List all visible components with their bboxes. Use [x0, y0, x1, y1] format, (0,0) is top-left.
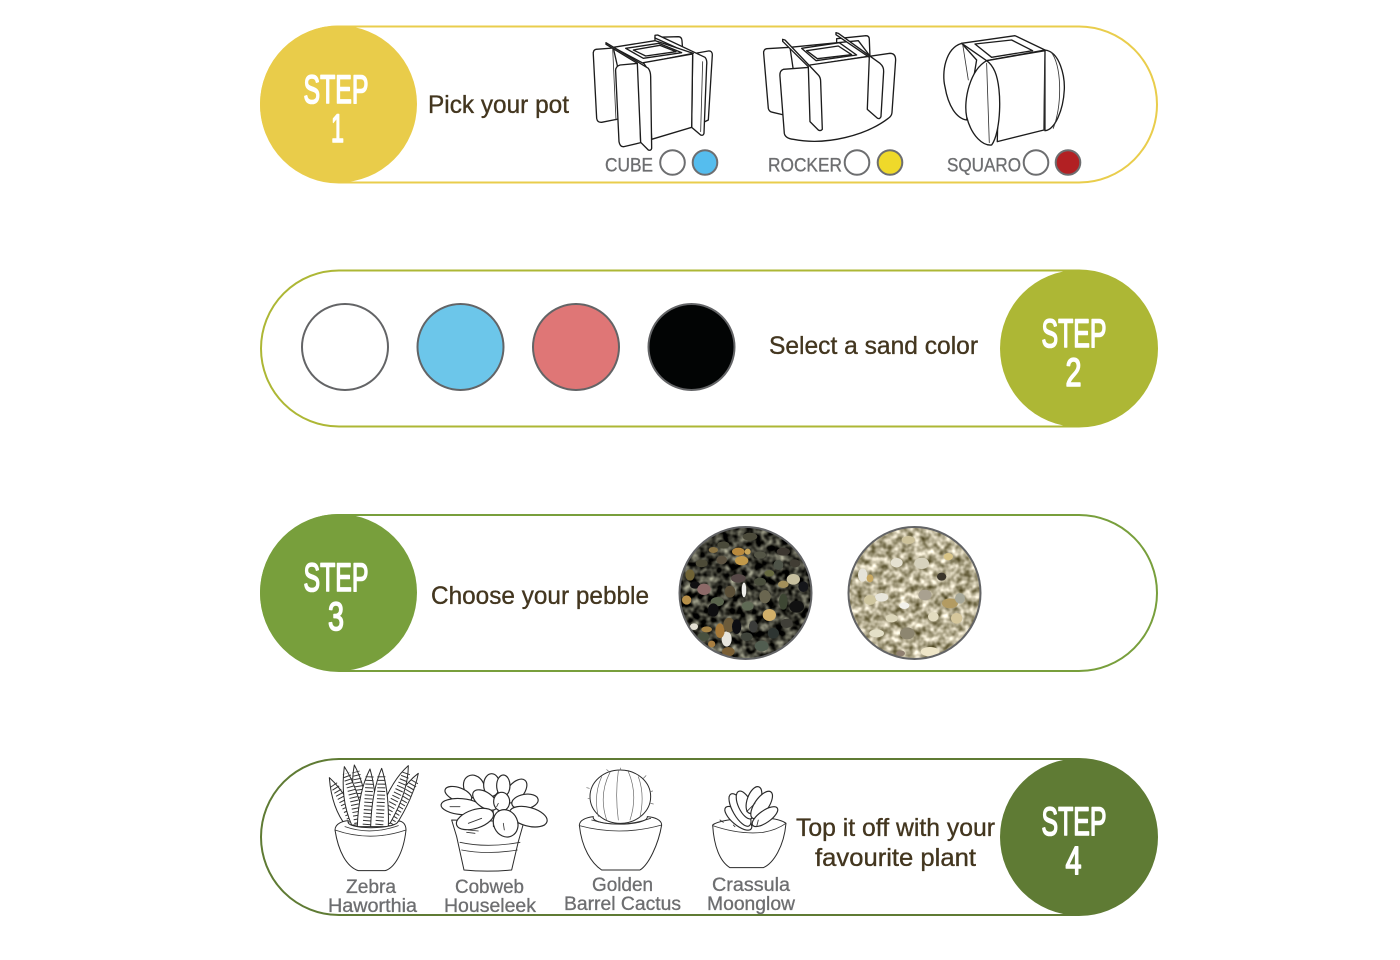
step 2 badge [1000, 270, 1157, 427]
option: squaro white [1024, 150, 1048, 175]
label: zebra haworthia: Zebra [346, 877, 396, 898]
panel outline [261, 515, 1157, 671]
heading: top it off with your favourite plant: Top it off with your [796, 814, 995, 842]
panel outline [261, 270, 1157, 426]
step 2 badge: STEP [1042, 312, 1106, 356]
label: golden barrel cactus [564, 875, 681, 915]
panel: step 1 pick your pot [260, 26, 1157, 182]
option: squaro red [1056, 150, 1080, 175]
heading: pick your pot: Pick your pot [428, 91, 569, 119]
label: cobweb houseleek: Cobweb [455, 877, 524, 898]
label: rocker: ROCKER [768, 156, 842, 176]
label: zebra haworthia [328, 877, 417, 917]
label: zebra haworthia: Haworthia [328, 896, 417, 917]
heading: choose your pebble: Choose your pebble [431, 582, 649, 610]
swatch: pink sand [533, 304, 619, 390]
icon: cube pot [593, 35, 712, 150]
step 4 badge: STEP [1042, 800, 1106, 844]
heading: select a sand color: Select a sand color [769, 332, 978, 360]
label: golden barrel cactus: Golden [592, 875, 653, 896]
label: squaro: SQUARO [947, 156, 1021, 176]
icon: golden barrel cactus [579, 768, 662, 870]
panel outline [261, 759, 1157, 915]
label: cube: CUBE [605, 156, 653, 176]
option: cube blue [693, 150, 717, 175]
icon: cobweb houseleek [440, 771, 549, 871]
step 3 badge: STEP [304, 556, 368, 600]
swatch: black sand [648, 304, 734, 390]
swatch: blue sand [418, 304, 504, 390]
step 4 badge [1000, 758, 1157, 916]
step 3 badge [260, 514, 417, 671]
icon: zebra haworthia [329, 765, 418, 871]
label: cobweb houseleek [444, 877, 537, 917]
panel outline [261, 26, 1157, 182]
label: crassula moonglow: Crassula [712, 875, 790, 896]
swatch: white sand [302, 304, 388, 390]
label: golden barrel cactus: Barrel Cactus [564, 894, 681, 915]
step 2 badge: 2 [1066, 351, 1082, 395]
heading: top it off with your favourite plant: favourite plant [815, 844, 976, 872]
icon: crassula moonglow [713, 785, 786, 868]
image: light pebbles [848, 527, 981, 659]
step 1 badge: 1 [331, 107, 344, 151]
step 1 badge: STEP [304, 68, 368, 112]
icon: squaro pot [944, 36, 1064, 145]
panel: step 2 sand colour [261, 270, 1157, 427]
panel: step 4 plant [261, 758, 1157, 917]
step 4 badge: 4 [1066, 839, 1082, 883]
icon: rocker pot [764, 33, 896, 141]
option: rocker yellow [878, 150, 902, 175]
image: dark pebbles [679, 527, 812, 659]
label: crassula moonglow [707, 875, 795, 915]
label: crassula moonglow: Moonglow [707, 894, 795, 915]
option: cube white [660, 150, 685, 175]
panel: step 3 pebble [260, 514, 1157, 671]
option: rocker white [845, 150, 869, 175]
label: cobweb houseleek: Houseleek [444, 896, 537, 917]
step 1 badge [260, 26, 417, 182]
step 3 badge: 3 [328, 595, 344, 639]
heading: top it off with your favourite plant [796, 814, 995, 872]
